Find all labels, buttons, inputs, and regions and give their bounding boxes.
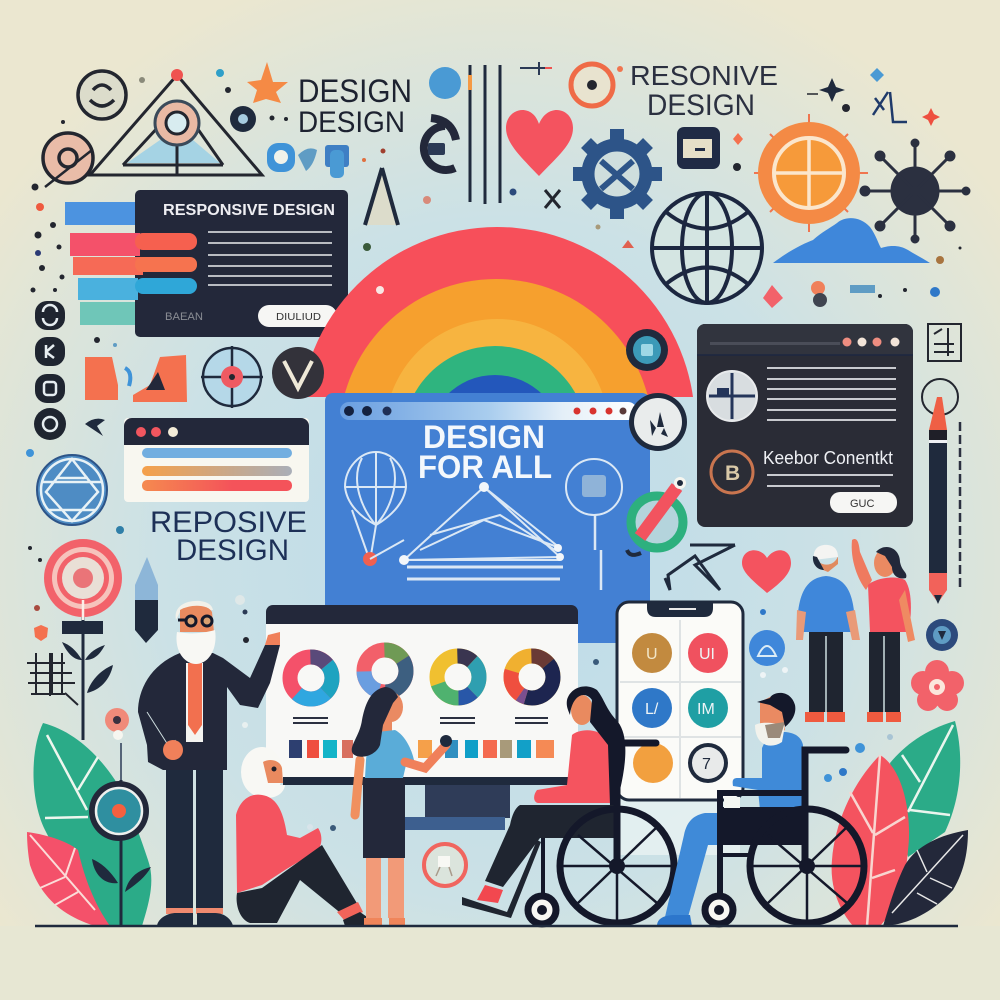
icon: small arrow top (520, 62, 552, 75)
main title (418, 419, 552, 485)
person: man in wheelchair (657, 693, 803, 926)
heading: resonive design: RESONIVE (630, 60, 778, 91)
diagram: balloon (345, 452, 406, 566)
smartphone: L/ (645, 701, 659, 718)
heading: design design: DESIGN (298, 73, 412, 109)
icon: crosshair (201, 346, 263, 408)
icon: gear (573, 129, 662, 219)
heading: reposive design: DESIGN (176, 534, 289, 567)
wheelchair: left (528, 743, 674, 924)
icon: grid (27, 653, 78, 705)
person: girl at monitor (352, 687, 452, 926)
color swatches (289, 740, 554, 758)
color bars left (65, 202, 197, 325)
scattered confetti (26, 69, 962, 831)
icon: clock (922, 379, 958, 415)
ground line (35, 925, 958, 927)
icon: blue badge near phone (749, 630, 785, 666)
smartphone: 7 (702, 756, 711, 773)
panel: small browser (124, 418, 309, 502)
icon: triangle emblem (90, 69, 262, 175)
rainbow (308, 227, 693, 397)
vertical rules (470, 65, 500, 204)
main title: FOR ALL (418, 449, 552, 485)
donut charts (290, 650, 553, 699)
left column icons (34, 301, 66, 440)
panel: dark right card (697, 324, 913, 527)
panel: responsive design (135, 190, 348, 337)
icon: compass badge (629, 393, 687, 451)
icon: tall pencil (929, 397, 960, 604)
person: woman red standing (852, 539, 915, 722)
smartphone (617, 602, 743, 855)
icon: V badge (272, 347, 324, 399)
icon: small shield (34, 625, 48, 641)
panel: main browser window (325, 393, 650, 643)
panel: dark right card: GUC (850, 498, 874, 510)
person: seated older person (236, 747, 380, 926)
person: woman in wheelchair (462, 686, 625, 918)
icon: stem target (89, 708, 151, 926)
panel: dark right card: B (725, 462, 740, 485)
icon: blue dot top (429, 67, 461, 99)
icon: calendar square (677, 127, 720, 169)
diagram: circle (566, 459, 622, 590)
icon: pen nib (135, 557, 158, 643)
leaves right (832, 721, 968, 926)
icon: heart small (742, 550, 791, 593)
small icons top row (267, 143, 349, 178)
smartphone: UI (699, 646, 715, 663)
icon: star (247, 62, 288, 103)
heading: resonive design: DESIGN (647, 89, 755, 122)
icon: ring spiral (424, 118, 456, 170)
leaves left (27, 723, 151, 926)
icon: globe (652, 193, 762, 303)
heading: design design (298, 73, 412, 139)
icon: round badge top (230, 106, 288, 132)
wheelchair: right (705, 750, 864, 924)
diagram: house lines (399, 482, 564, 579)
icon: right stamp (928, 324, 961, 361)
heading: reposive design: REPOSIVE (150, 506, 307, 539)
panel: responsive design: DIULIUD (276, 312, 321, 323)
icon: circle left top (78, 71, 126, 119)
panel: responsive design: BAEAN (165, 311, 203, 323)
icon: sparkle and letters (807, 68, 940, 126)
person: man blue standing (796, 545, 860, 722)
icon: blue badge and flower (911, 619, 964, 711)
icon: letter A (365, 168, 398, 225)
smartphone: IM (697, 701, 715, 718)
icon: pencil and ring (627, 477, 686, 555)
icon: target flower (44, 539, 122, 740)
heading: design design: DESIGN (298, 106, 405, 139)
icon: wire globe (37, 455, 107, 525)
icon: network node (861, 140, 969, 242)
smartphone: U (646, 646, 658, 663)
panel label: Keebor Conentkt (763, 448, 893, 468)
icon: target orange (571, 64, 623, 106)
icon: floor ring (424, 844, 466, 886)
panel title: RESPONSIVE DESIGN (163, 202, 335, 219)
person: older man with beard (138, 601, 280, 926)
icon: heart (506, 110, 573, 176)
heading: reposive design (150, 506, 307, 567)
icon: circle left lower (32, 133, 93, 190)
icon: orange sun (754, 114, 868, 232)
icon: cloud (773, 218, 930, 263)
monitor (266, 605, 578, 830)
orange shapes (85, 355, 187, 402)
heading: resonive design (630, 60, 778, 122)
main title: DESIGN (423, 419, 545, 455)
icon: round screen badge (626, 329, 668, 371)
icon: broken lines (665, 545, 735, 590)
